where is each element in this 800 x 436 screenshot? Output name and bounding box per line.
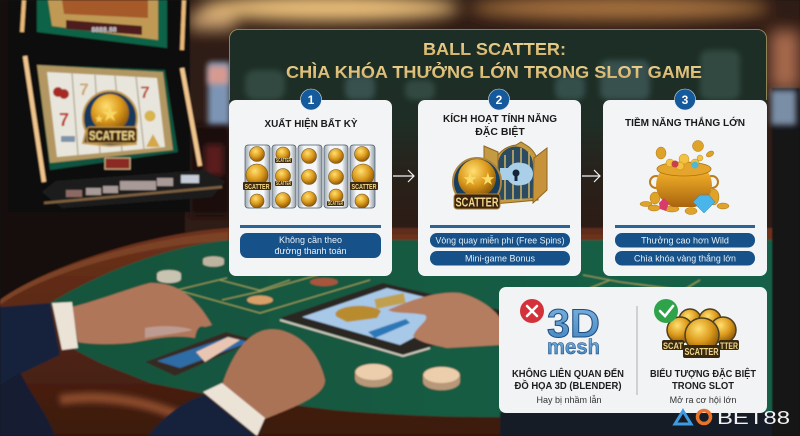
panel: step 2 [418,100,581,276]
scatter badge on machine: ★ [94,114,104,124]
panel: title backdrop [230,30,766,234]
title: BALL SCATTER: [423,39,566,59]
panel: step 1 [229,100,392,276]
step badge 3 [674,89,696,110]
step 2 heading [443,112,557,138]
icon: reels with scatter symbols: SCATTER [276,158,291,164]
icon: scatter and vault door: ★ ★ [463,171,495,187]
title [286,39,702,82]
step badge 1: 1 [308,93,315,107]
text: special symbol: TRONG SLOT [672,381,734,392]
betting chips [157,256,460,390]
text: not 3D: KHÔNG LIÊN QUAN ĐẾN [512,367,624,380]
icon: scatter coins with check: SCATTER [684,347,719,358]
title: CHÌA KHÓA THƯỞNG LỚN TRONG SLOT GAME [286,61,702,82]
step badge 3: 3 [682,93,689,107]
scatter badge on machine: SCATTER [89,128,135,143]
right hand [0,329,325,436]
icon: reels with scatter symbols: SCATTER [328,201,343,207]
arrow 1 to 2 [393,170,414,182]
slot symbols: 7 [59,110,69,130]
icon: 3D mesh with cross: 3D [547,302,600,346]
callout: mini-game: Mini-game Bonus [465,254,536,264]
slot machine: 8888.88 [91,27,117,34]
left hand [0,283,212,385]
text: not 3D: Hay bị nhầm lẫn [536,395,602,405]
callout: higher than wild: Thưởng cao hơn Wild [641,236,729,246]
callout: no payline [240,233,381,258]
callout: free spins [430,233,570,248]
icon: reels with scatter symbols: SCATTER [276,181,291,187]
step 2 heading: ĐẶC BIỆT [475,125,525,138]
text: not 3D [512,367,624,405]
step badge 2: 2 [496,93,503,107]
callout: golden key [615,251,755,266]
table betting grid [177,270,760,313]
logo: ALOBET88: BET88 [717,408,790,428]
icon: scatter coins with check: SCAT [663,341,683,351]
tablet [280,283,500,356]
slot machine [8,0,225,212]
icon: reels with scatter symbols: SCATTER [352,182,377,191]
icon: scatter coins with check [654,299,739,358]
arrow 2 to 3 [582,170,600,182]
step 3 heading: TIỀM NĂNG THẮNG LỚN [625,116,745,129]
text: special symbol: Mở ra cơ hội lớn [670,395,736,405]
panel: comparison [499,287,767,413]
icon: scatter coins with check: TTER [720,341,738,351]
icon: reels with scatter symbols [243,145,378,208]
icon: pot of gold [640,140,729,214]
callout: mini-game [430,251,570,266]
icon: 3D mesh with cross [520,299,600,359]
icon: reels with scatter symbols: SCATTER [244,182,270,191]
step badge 2 [488,89,510,110]
callout: golden key: Chìa khóa vàng thắng lớn [634,254,736,264]
text: special symbol [650,367,756,405]
scatter badge on machine [83,91,137,146]
tablet hand [388,293,500,348]
dark lower right [500,412,800,436]
scatter badge on machine: ★ [102,105,118,124]
roulette table [0,88,800,436]
slot symbols [53,80,160,147]
phone [145,332,256,376]
icon: 3D mesh with cross: mesh [547,336,600,359]
logo: ALOBET88 [675,408,790,428]
callout: higher than wild [615,233,755,248]
text: not 3D: ĐỒ HỌA 3D (BLENDER) [514,379,622,392]
icon: scatter and vault door: SCATTER [456,196,498,210]
callout: no payline: Không cần theo [279,235,342,245]
text: special symbol: BIỂU TƯỢNG ĐẶC BIỆT [650,367,756,380]
callout: no payline: đường thanh toán [275,246,346,256]
slot symbols: 7 [79,80,89,99]
callout: free spins: Vòng quay miễn phí (Free Spins) [436,236,564,246]
icon: scatter and vault door [453,142,547,210]
step badge 1 [300,89,322,110]
slot symbols: 7 [140,83,150,102]
panel: step 3 [603,100,767,276]
step 1 heading: XUẤT HIỆN BẤT KỲ [264,117,358,130]
step 2 heading: KÍCH HOẠT TÍNH NĂNG [443,112,557,125]
